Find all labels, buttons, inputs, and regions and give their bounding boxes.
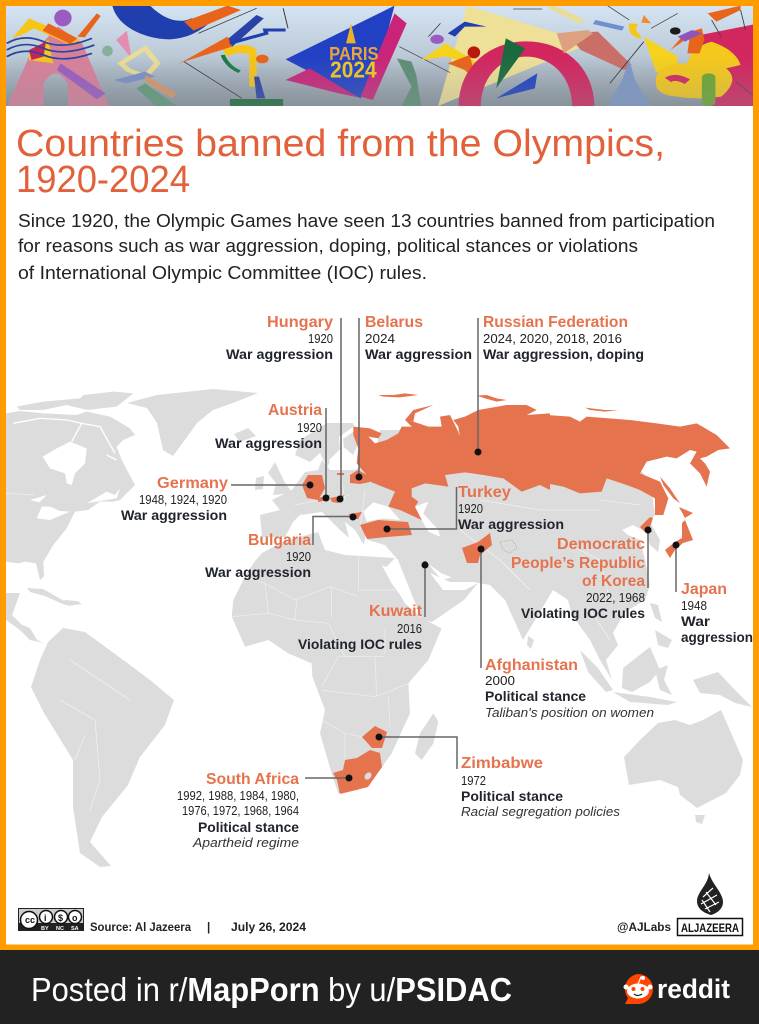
label: Zimbabwe: Zimbabwe [461,755,543,772]
label: Afghanistan: 2000 [485,674,515,688]
creative commons badge: i [44,913,47,923]
Belarus [350,470,370,484]
Asian islands [527,603,672,649]
label: Turkey [384,484,564,532]
inland seas and country borders [60,428,640,810]
North America [6,392,135,580]
Bulgaria [349,512,362,519]
Greenland [127,389,258,456]
label: Russian Federation: Russian Federation [483,314,628,331]
label: Bulgaria: Bulgaria [248,532,311,549]
label: Afghanistan [478,546,654,720]
label: Belarus: Belarus [365,314,423,331]
label: North Korea: of Korea [582,573,645,590]
label: Japan: 1948 [681,599,707,613]
intro text: Since 1920, the Olympic Games have seen 13 countries banned from participation [18,211,715,231]
label: Kuwait [298,562,428,652]
Al Jazeera logo: ALJAZEERA [681,923,739,935]
intro text: for reasons such as war aggression, doping, political stances or violations [18,236,638,256]
highlighted countries [302,393,730,794]
Iceland [234,428,256,442]
label: Turkey: Turkey [458,484,511,501]
title: Countries banned from the Olympics, [16,123,665,165]
label: Zimbabwe [376,734,620,819]
label: North Korea: Violating IOC rules [521,605,645,621]
South America [31,628,174,867]
banner: Paris 2024 artwork [6,6,759,106]
label: Bulgaria: 1920 [286,550,311,564]
Australia [624,710,743,808]
Afghanistan [462,533,492,563]
label: Afghanistan: Taliban's position on women [485,706,654,720]
label: Zimbabwe: Political stance [461,788,563,804]
label: Kuwait: Kuwait [369,603,422,620]
banner: Paris 2024 artwork: PARIS [329,43,379,64]
label: North Korea [511,526,652,621]
label: Zimbabwe: 1972 [461,774,486,788]
world map base [6,389,752,867]
icon: reddit mascot [624,974,653,1004]
Russia [353,393,730,520]
Kuwait [424,561,426,564]
label: Bulgaria: War aggression [205,564,311,580]
label: South Africa: Apartheid regime [192,836,299,850]
label: Russian Federation: 2024, 2020, 2018, 2016 [483,332,622,346]
source line: | [207,922,210,934]
label: South Africa: 1976, 1972, 1968, 1964 [182,804,299,818]
label: Japan: War [681,613,711,629]
label: Germany: War aggression [121,507,227,523]
creative commons badge: o [72,913,78,923]
label: Hungary [226,314,344,502]
label: Hungary: War aggression [226,346,333,362]
banner: Paris 2024 artwork: 2024 [330,56,377,82]
label: Belarus: War aggression [365,346,472,362]
label: Turkey: War aggression [458,516,564,532]
label: Belarus [356,314,472,480]
Austria [318,495,330,502]
attribution bar: reddit [657,974,730,1004]
label: Austria: War aggression [215,435,322,451]
attribution bar: Posted in r/MapPorn by u/PSIDAC [31,971,512,1008]
intro text: of International Olympic Committee (IOC) rules. [18,263,427,283]
label: North Korea: 2022, 1968 [586,591,645,605]
Japan [665,507,693,558]
label: Austria: Austria [268,402,322,419]
Zimbabwe [362,726,387,748]
Hungary [330,495,345,503]
label: Russian Federation: War aggression, doping [483,346,644,362]
label: South Africa: 1992, 1988, 1984, 1980, [177,789,299,803]
label: Russian Federation [474,314,644,456]
label: North Korea: Democratic [557,536,645,553]
label: Germany [121,475,314,523]
creative commons badge: NC [56,926,64,932]
label: South Africa: South Africa [206,771,299,788]
attribution bar [0,950,759,1024]
Germany [302,475,325,500]
Kaliningrad [337,473,344,475]
source line [90,922,671,934]
label: Japan: Japan [681,581,727,598]
label: Hungary: 1920 [308,332,333,346]
Madagascar [415,713,438,760]
North Korea [640,517,653,532]
title: 1920-2024 [16,159,190,201]
label: Kuwait: 2016 [397,622,422,636]
source line: July 26, 2024 [231,922,307,934]
creative commons badge: BY [41,926,49,932]
Eurasia [260,430,660,680]
label: Belarus: 2024 [365,332,395,346]
creative commons badge: SA [71,926,79,932]
label: Japan: aggression [681,629,753,645]
Lesotho [363,771,373,781]
source line: @AJLabs [617,922,671,934]
label: Zimbabwe: Racial segregation policies [461,805,620,819]
label: Hungary: Hungary [267,314,333,331]
label: Austria: 1920 [297,421,322,435]
label: South Africa [177,771,352,850]
Al Jazeera logo [678,873,742,936]
label: Turkey: 1920 [458,502,483,516]
creative commons badge [18,908,84,932]
label: South Africa: Political stance [198,819,299,835]
label: Kuwait: Violating IOC rules [298,636,422,652]
title [16,123,665,201]
creative commons badge: $ [58,913,63,923]
label: Japan [672,542,753,645]
Scandinavia [295,423,360,467]
label: Afghanistan: Afghanistan [485,657,578,674]
Africa [232,532,442,793]
creative commons badge: cc [25,915,35,925]
label: Bulgaria [205,514,356,580]
South Africa [333,750,382,794]
Turkey [360,520,412,539]
British Isles [255,462,293,495]
label: Germany: 1948, 1924, 1920 [139,493,227,507]
label: Afghanistan: Political stance [485,688,586,704]
label: Austria [215,402,330,502]
intro text [18,211,715,283]
label: Germany: Germany [157,475,228,492]
source line: Source: Al Jazeera [90,922,192,934]
label: North Korea: People’s Republic [511,555,645,572]
Caribbean and Central America [6,593,43,643]
